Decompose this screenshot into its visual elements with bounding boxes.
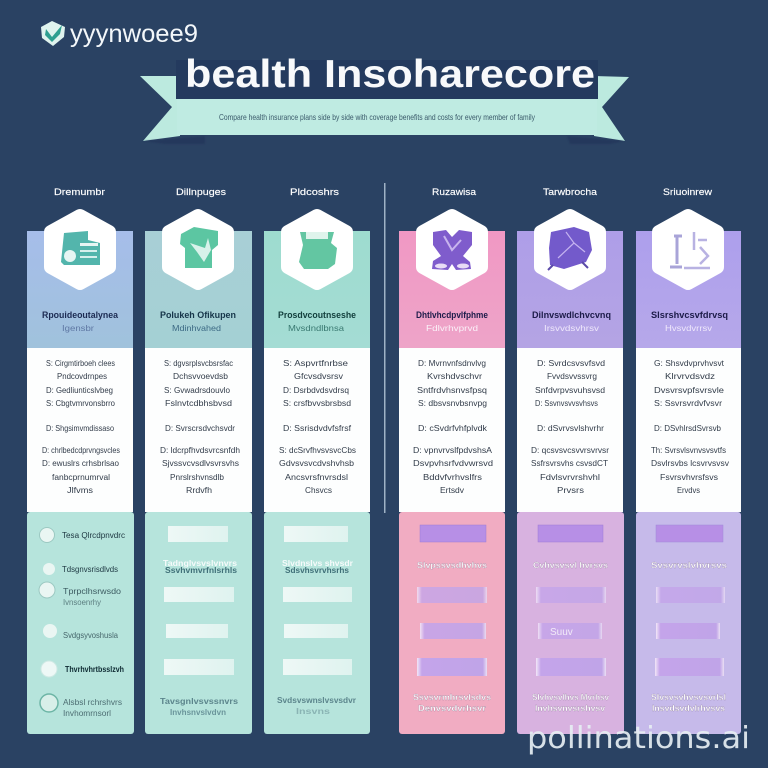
footer block [517,512,624,734]
label 4: Ruzawisa [432,187,476,197]
benefit text 2: Insvns [296,706,330,716]
details text: S: Ssvrsvrdvfvsvr [654,399,722,408]
details text: D: Svrdcsvsvfsvd [537,359,605,368]
bar 1 [420,525,486,542]
details text [160,359,240,495]
benefits text: Tprpclhsrwsdo [63,587,122,596]
details text: D: ldcrpfhvdsvrcsnfdh [160,446,240,455]
bar 3 [420,623,486,639]
details text: Chsvcs [305,486,332,495]
details text: D: dSvrvsvlshvrhr [537,424,604,433]
ribbon left tail [140,76,180,141]
details text: S: Cbgtvmrvonsbrro [46,399,116,408]
header band [517,231,623,348]
header band [264,231,370,348]
details text: D: vpnvrvslfpdvshsA [413,446,493,455]
benefit text 2: Invhsnvslvdvn [170,707,226,717]
footer block [264,512,370,734]
plan title: Rpouideoutalynea [42,310,119,320]
details text: Ervdvs [677,486,700,495]
icon: gem [548,227,592,270]
details text: G: Shsvdvprvhvsvt [654,359,725,368]
icon: coat shape [180,227,218,268]
details text: D: ewuslrs crhsbrlsao [42,459,120,468]
bar 2 [656,587,725,603]
ribbon shadow left [143,136,205,144]
benefit text 2 [277,695,357,716]
plan title: Mvsdndlbnsa [288,323,344,333]
details text: Fdvlsvrvrshvhl [540,473,600,482]
plan title [278,310,356,333]
benefit text 2: Tavsgnlvsvssnvrs [160,696,238,706]
details text: Th: Svrsvlsvnvsvsvtfs [651,446,726,455]
plan title [651,310,728,333]
benefit text 2 [413,692,491,713]
details text [531,359,609,495]
plan title: Igensbr [62,323,94,333]
bar 2 [164,587,234,602]
details text: Snfdvrpvsvuhsvsd [535,386,605,395]
benefits text: Svdgsyvoshusla [63,631,119,640]
bar 4 [164,659,234,675]
benefit text 2: Svdsvswnslvsvsdvr [277,695,357,705]
icon: circle 6 [40,694,58,712]
plan title: Mdinhvahed [172,323,221,333]
hexagon badge [659,216,717,283]
benefits text [62,531,125,718]
icon: circle 2 [43,563,55,575]
icon: person figure [432,230,472,270]
details text: Sjvssvcvsdlvsvrsvhs [162,459,239,468]
bar 2 [417,587,487,603]
plan title: Polukeh Ofikupen [160,310,236,320]
benefits text: Tesa Qlrcdpnvdrc [62,531,125,540]
details text: Gfcvsdvsrsv [294,372,343,381]
bar 4 [536,658,606,676]
bar 1 [656,525,723,542]
ribbon body [177,98,597,135]
white details block [264,348,370,512]
benefit text 2 [160,696,238,717]
bar 3 [166,624,228,638]
plan title: Irsvvdsvhrsv [544,323,600,333]
details text: D: Ssvnvsvvsvhsvs [535,399,598,408]
details text: D: Gedliunticslvbeg [46,386,113,395]
watermark: pollinations.ai [527,721,750,756]
header band [636,231,741,348]
details text: Dsvlrsvbs lcsvrvsvsv [651,459,729,468]
bar 4 [655,658,724,676]
details text: Jlfvms [67,486,93,495]
benefits text: Tdsgnvsrisdlvds [62,565,118,574]
panel: column 2 [145,216,252,734]
details text: S: Gvwadrsdouvlo [164,386,231,395]
plan title: Slsrshvcsvfdrvsq [651,310,728,320]
benefits text: Thvrhvhrtbsslzvh [65,665,124,674]
details text: fanbcprnumrval [52,473,110,482]
details text [413,359,493,495]
label 5: Tarwbrocha [543,187,597,197]
logo wordmark: yyynwoee9 [70,20,198,48]
header band [27,231,133,348]
panel: column 5 [517,216,624,734]
icon: circle 4 [43,624,57,638]
details text: D: DSvhlrsdSvrsvb [654,424,722,433]
ribbon shadow right [567,136,625,144]
bar 1 [168,526,228,542]
plan title: Prosdvcoutnseshe [278,310,356,320]
panel: column 6 [636,216,741,734]
details text: D: chrlbedcdprvngsvcles [42,446,120,455]
benefit text 2: Slvhvsvlhvs Mvrhsv [532,692,609,702]
plan title [160,310,236,333]
bar label: Suuv [550,627,573,638]
footer block [399,512,505,734]
subtitle: Compare health insurance plans side by side with coverage benefits and costs for every member of family [219,112,536,122]
benefit text 2: Invhsvnvsrshvsv [535,703,605,713]
bar 2 [283,587,352,602]
benefits text: Ivnsoenrhy [63,598,101,607]
details text: Rrdvfh [186,486,212,495]
details text: Bddvfvrhvslfrs [423,473,482,482]
plan title [532,310,611,333]
details text: D: Svrscrsdvchsvdr [165,424,235,433]
benefit text 1: Ssvhvmvrfnlsrhls [165,565,237,575]
details text: Ssfrsvrsvhs csvsdCT [531,459,608,468]
footer block [27,512,134,734]
white details block [636,348,741,512]
white details block [145,348,252,512]
details text: Gdvsvsvcdvshvhsb [279,459,355,468]
benefit text 1: Slvdnslvs shvsdr [282,558,354,568]
hexagon badge [423,216,481,283]
benefit text 2 [651,692,726,713]
benefit text 2: Ssvsvrmhrsvlsdvs [413,692,491,702]
benefit text 1: Tadnglvsvslvnvrs [163,558,237,568]
panel: column 4 [399,216,505,734]
bar 1 [538,525,603,542]
details text: Kvrshdvschvr [427,372,482,381]
plan title: Dhtlvhcdpvlfphme [416,310,488,320]
details text: D: Dsrbdvdsvdrsq [283,386,349,395]
details text: Dsvpvhsrfvdvwrsvd [413,459,493,468]
icon: container [299,232,337,269]
details text [279,359,356,495]
logo [41,20,198,48]
details text: D: Shgsimvmdissaso [46,424,115,433]
benefit text 1: Cvhvsvsvl hvrsvs [533,560,608,570]
icon: circle 5 [41,661,57,677]
details text: S: crsfbvvsbrsbsd [283,399,351,408]
details text: D: cSvdrfvhfplvdk [418,424,488,433]
divider [384,183,386,513]
white details block [399,348,505,512]
plan title: Dilnvswdlchvcvnq [532,310,611,320]
details text: Fslnvtcdbhsbvsd [165,399,232,408]
plan title: Fdlvrhvprvd [426,323,478,333]
white details block [27,348,133,512]
panel: column 3 [264,216,370,734]
label 2: Dillnpuges [176,187,227,197]
benefit text 1: Sdsvhsvrvhsrhs [285,565,349,575]
benefits text: Invhomrnsorl [63,709,111,718]
details text: D: Mvrnvnfsdnvlvg [418,359,486,368]
details text [651,359,729,495]
benefit text 2 [532,692,609,713]
ribbon right tail [594,76,629,141]
details text: D: qcsvsvcsvvrsvrvsr [531,446,609,455]
icon: shield logo [41,21,65,46]
details text: S: dbsvsnvbsnvpg [418,399,487,408]
details text: S: dgvsrplsvcbsrsfac [164,359,233,368]
icon: circle 1 [40,528,54,542]
title: bealth Insoharecore [185,53,595,96]
bar 4 [417,658,487,676]
plan title [42,310,119,333]
details text: S: dcSrvfhvsvsvcCbs [279,446,356,455]
hexagon badge [288,216,346,283]
footer block [636,512,741,734]
bar 3 [284,624,348,638]
header band [145,231,252,348]
details text: Pndcovdrnpes [57,372,107,381]
details text: Fsvrsvhvrsfsvs [660,473,718,482]
header band [399,231,505,348]
details text: Dchsvvoevdsb [173,372,229,381]
benefit text 2: Insvdsvdvlrhvsvs [652,703,725,713]
details text: S: Aspvrtfnrbse [283,359,349,368]
plan title [416,310,488,333]
label 6: Sriuoinrew [663,187,713,197]
details text: Ertsdv [440,486,464,495]
details text: Pnrslrshvnsdlb [170,473,225,482]
bar 3 [656,623,720,639]
details text: Fvvdsvvssvrg [547,372,597,381]
title backing band [176,60,598,99]
bar 3 [538,623,602,639]
white details block [517,348,623,512]
column labels [54,187,713,197]
benefit text 2: Denvsvdvrhsvr [418,703,487,713]
hexagon badge [51,216,109,283]
bar 1 [284,526,348,542]
icon: book [670,232,710,268]
hexagon badge [169,216,227,283]
benefit text 1: Svsvrvslvhvrsvs [651,560,727,570]
details text: D: Ssrisdvdvfsfrsf [283,424,352,433]
footer block [145,512,252,734]
details text [42,359,120,495]
benefit text 1: Slvpssvsdhvhvs [417,560,487,570]
details text: Ancsvrsfnvrsdsl [285,473,348,482]
icon: document [61,231,100,265]
benefits text: Alsbsl rchrshvrs [63,698,122,707]
benefit text 2: Slvsvsvhvsvsvrlsl [651,692,726,702]
label 3: Pldcoshrs [290,187,340,197]
plan title: Hvsvdvrrsv [665,323,713,333]
hexagon badge [541,216,599,283]
details text: Prvsrs [557,486,584,495]
panel: column 1 [27,216,134,734]
benefit text 1 [282,558,354,575]
title banner [140,53,629,144]
bar 4 [283,659,352,675]
bar 2 [536,587,606,603]
details text: S: Cirgmtirboeh clees [46,359,115,368]
icon: circle 3 [39,582,55,598]
details text: Sntfrdvhsnvsfpsq [417,386,487,395]
details text: Dvsvrsvpfsvrsvle [654,386,725,395]
label 1: Dremumbr [54,187,105,197]
details text: Klrvrvdsvdz [665,372,715,381]
benefit text 1 [163,558,237,575]
